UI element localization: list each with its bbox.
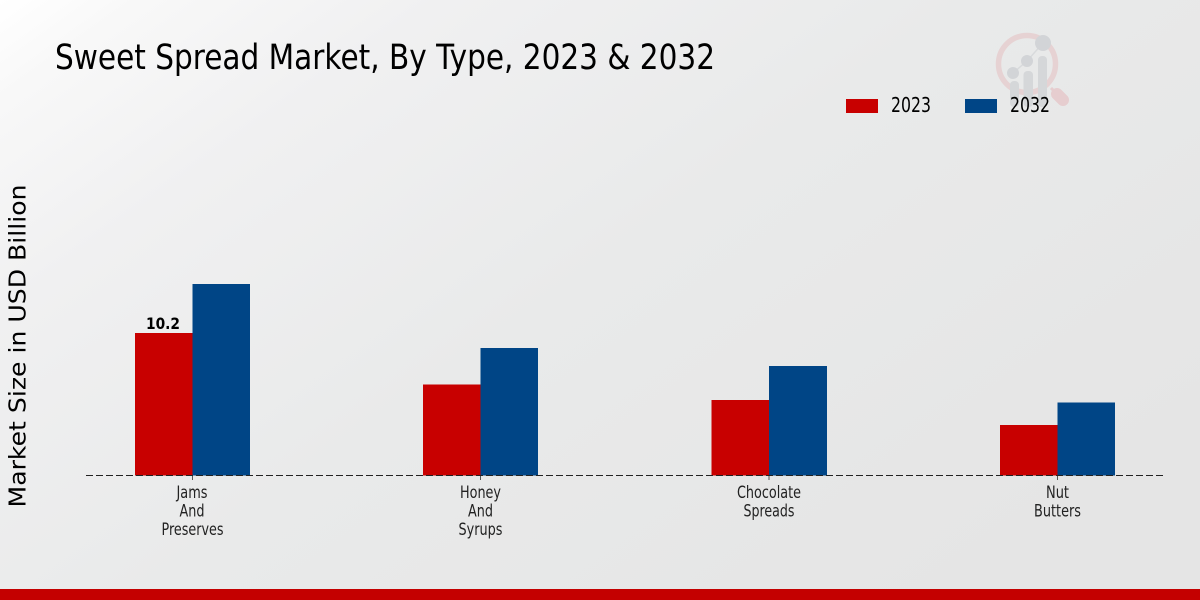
category label: Chocolate Spreads xyxy=(737,483,801,520)
category label: Honey And Syrups: And xyxy=(468,502,493,520)
category label: Nut Butters xyxy=(1034,483,1081,520)
bars: Honey And Syrups xyxy=(423,348,538,476)
category label: Honey And Syrups xyxy=(458,483,502,539)
bar chart xyxy=(86,284,1164,539)
value label: 10.2: 10.2 xyxy=(146,314,180,333)
y axis title: Market Size in USD Billion xyxy=(4,185,32,507)
category label: Jams And Preserves: And xyxy=(180,502,204,520)
category label: Chocolate Spreads: Chocolate xyxy=(737,483,801,502)
legend item: 2032: 2032 xyxy=(1010,93,1050,117)
legend xyxy=(846,93,1050,117)
legend item: 2023 xyxy=(846,93,931,117)
icon: watermark logo xyxy=(998,35,1063,107)
bars: Chocolate Spreads xyxy=(712,366,827,476)
title: Sweet Spread Market, By Type, 2023 & 2032 xyxy=(55,38,715,78)
bars: Jams And Preserves xyxy=(135,284,250,476)
footer bar xyxy=(0,589,1200,600)
legend item: 2032 xyxy=(965,93,1050,117)
category label: Honey And Syrups: Honey xyxy=(460,483,501,502)
x axis baseline xyxy=(86,474,1164,476)
tick marks xyxy=(192,476,1058,480)
category label: Honey And Syrups: Syrups xyxy=(458,520,502,539)
bars: Nut Butters xyxy=(1000,402,1115,476)
category label: Jams And Preserves: Jams xyxy=(176,483,208,502)
category label: Nut Butters: Butters xyxy=(1034,502,1081,520)
category label: Chocolate Spreads: Spreads xyxy=(744,502,794,520)
category label: Nut Butters: Nut xyxy=(1046,483,1069,502)
category label: Jams And Preserves: Preserves xyxy=(162,520,224,539)
legend item: 2023: 2023 xyxy=(891,93,931,117)
category label: Jams And Preserves xyxy=(162,483,224,539)
